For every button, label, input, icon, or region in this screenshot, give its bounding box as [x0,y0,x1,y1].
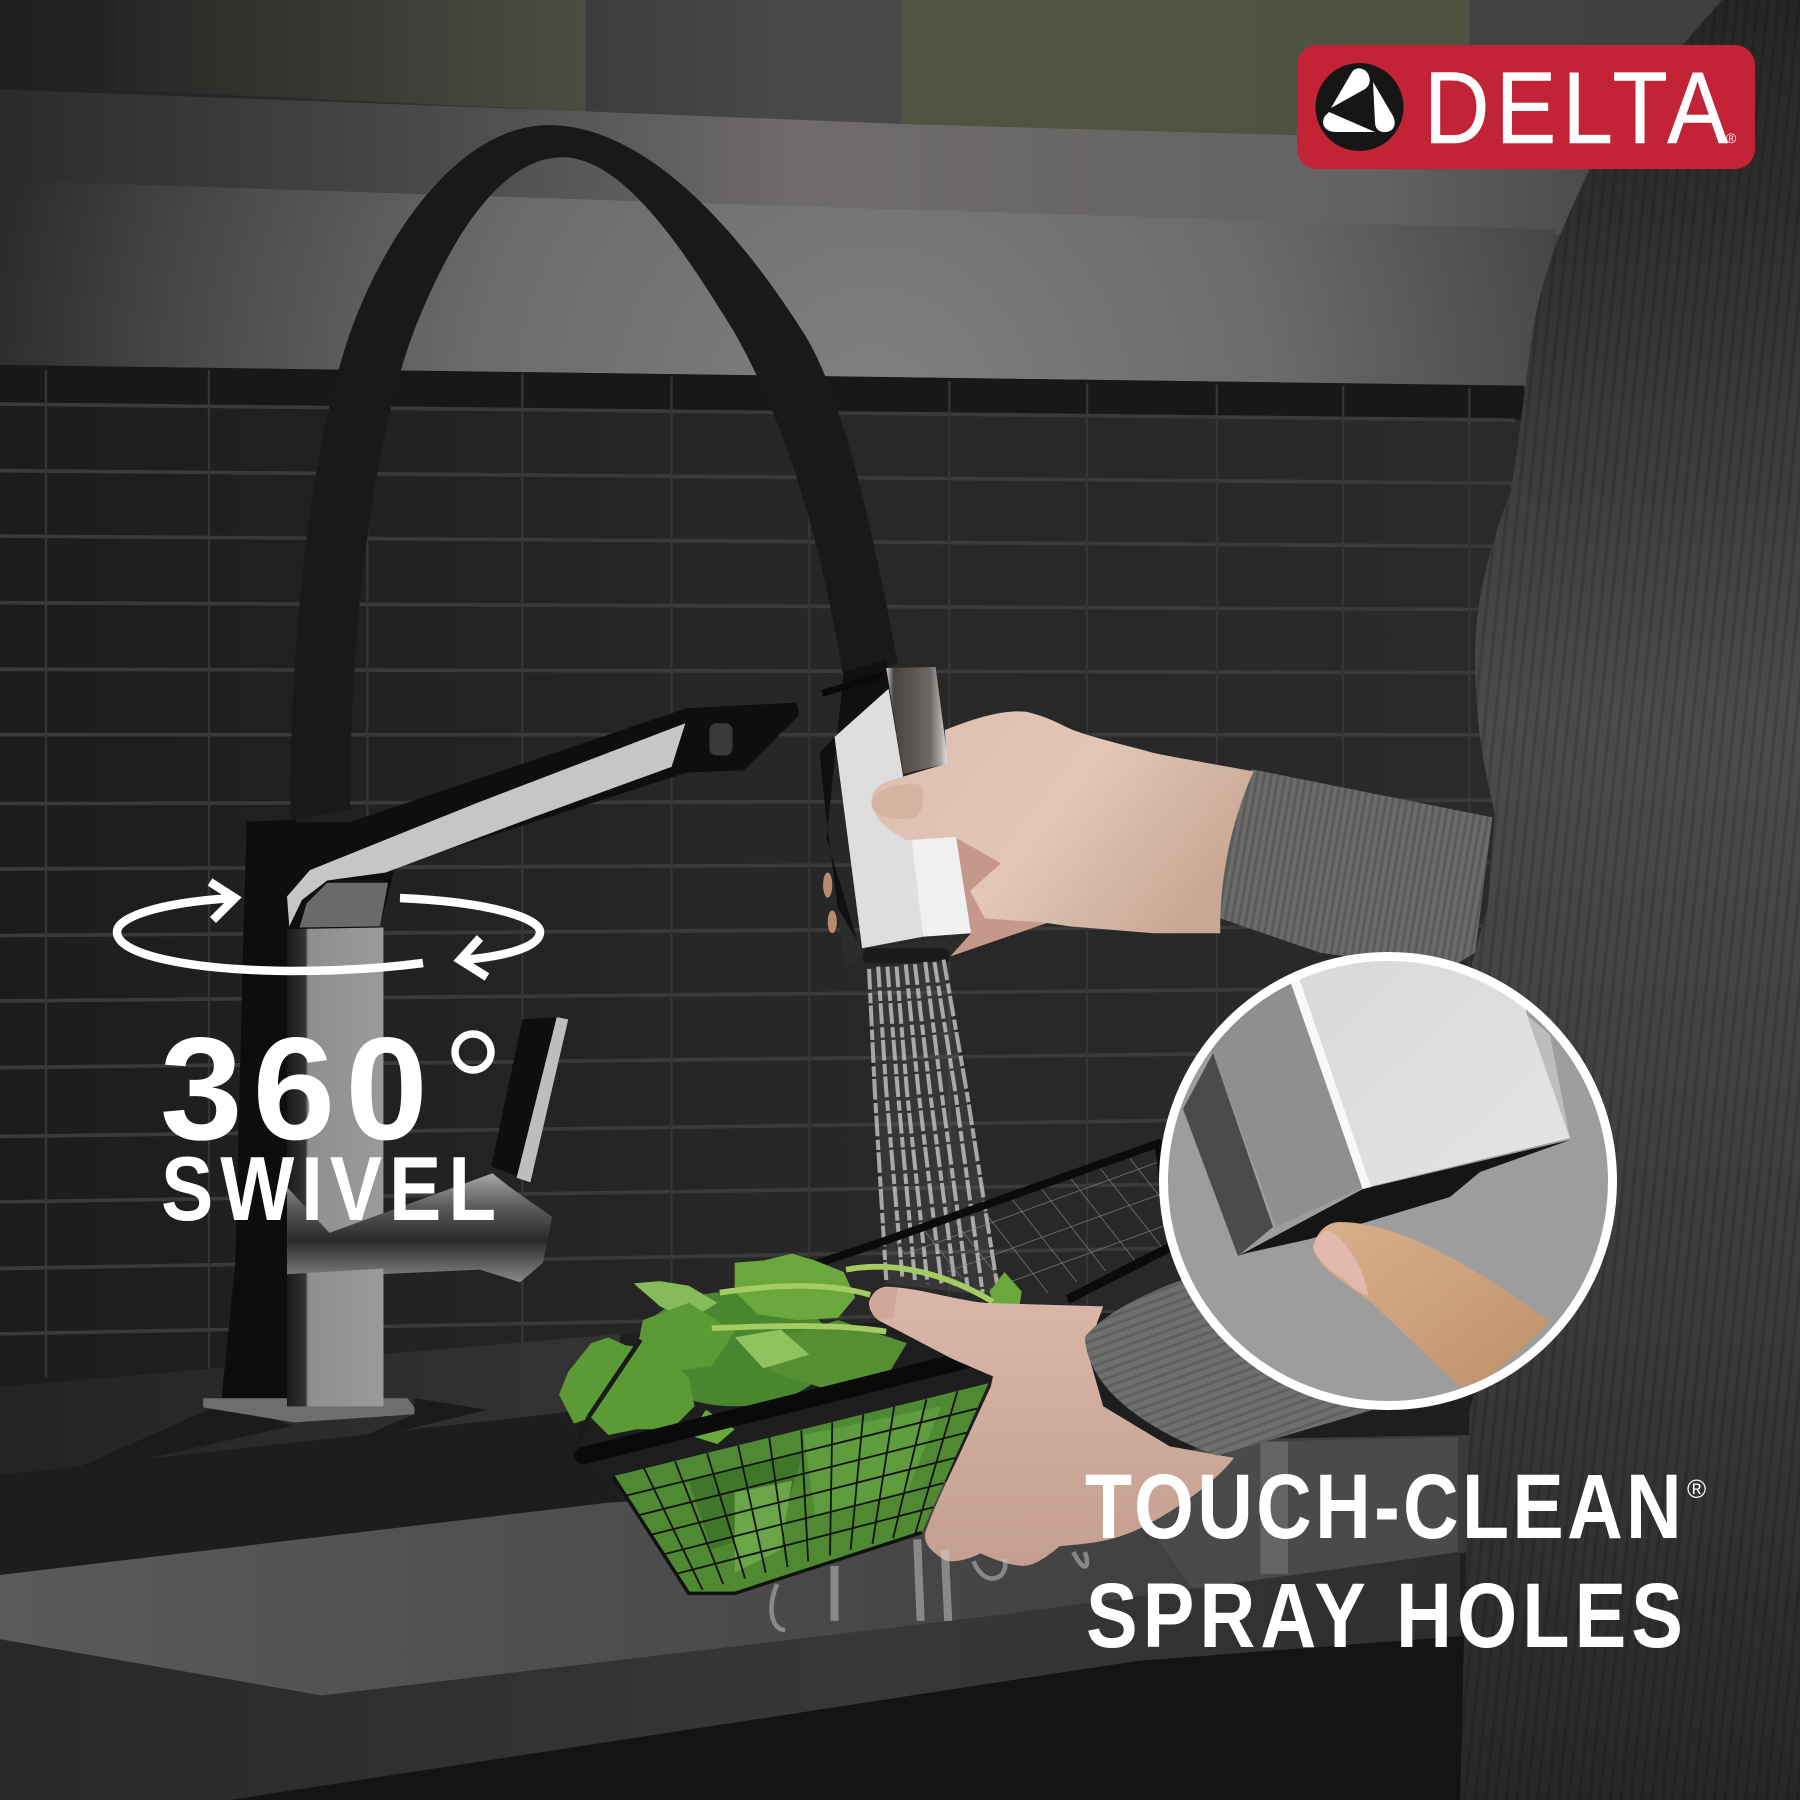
faucet: lever handle [287,1017,568,1406]
callout: 360 degree swivel [160,1007,503,1240]
inset: fingernail [1313,1230,1368,1296]
callout: Touch-Clean spray holes: TOUCH-CLEAN [1085,1456,1685,1558]
inset: grey reflection sliver [1527,1015,1570,1138]
sleeve: lower arm [1085,1280,1469,1456]
inset: finger [1313,1222,1550,1395]
upper hand holding sprayer [871,711,1254,956]
faucet: body and base [203,820,414,1422]
logo: triangle emblem [1316,63,1404,151]
herbs: cilantro [559,1254,1022,1444]
sprayer head [820,660,971,965]
wire basket front [574,1340,988,1593]
inset circle: finger clearing spray holes [1164,930,1612,1406]
logo: registered mark: ® [1726,130,1737,146]
inset: dark side face [1183,1053,1273,1256]
inset: middle grey face [1212,984,1362,1227]
window and cabinet wall [0,0,1800,396]
degree symbol [455,1034,491,1070]
inset: chrome edge highlight [1288,975,1371,1190]
callout: Touch-Clean spray holes [1085,1456,1706,1667]
lower hand holding basket [869,1287,1234,1566]
sweater torso [1460,0,1800,1800]
inset: spray face underside [1238,1140,1570,1256]
callout: Touch-Clean spray holes: SPRAY HOLES [1086,1565,1688,1667]
faucet: black arched hose [290,125,898,821]
tiled backsplash [0,365,1524,1412]
callout: 360 degree swivel: SWIVEL [161,1139,503,1240]
registered mark: ® [1687,1474,1706,1504]
wire basket back [641,1142,1173,1340]
water splash [772,1539,1087,1630]
faucet: spout [247,703,799,930]
sleeve: upper arm [1220,769,1492,970]
inset: light front face [1300,961,1570,1186]
Delta logo badge [1297,45,1755,169]
countertop and sink [0,1297,1481,1800]
swivel arrows icon [117,882,540,977]
water spray [869,960,1001,1297]
logo: wordmark: DELTA [1424,51,1734,165]
callout: 360 degree swivel: 360 [160,1007,438,1170]
